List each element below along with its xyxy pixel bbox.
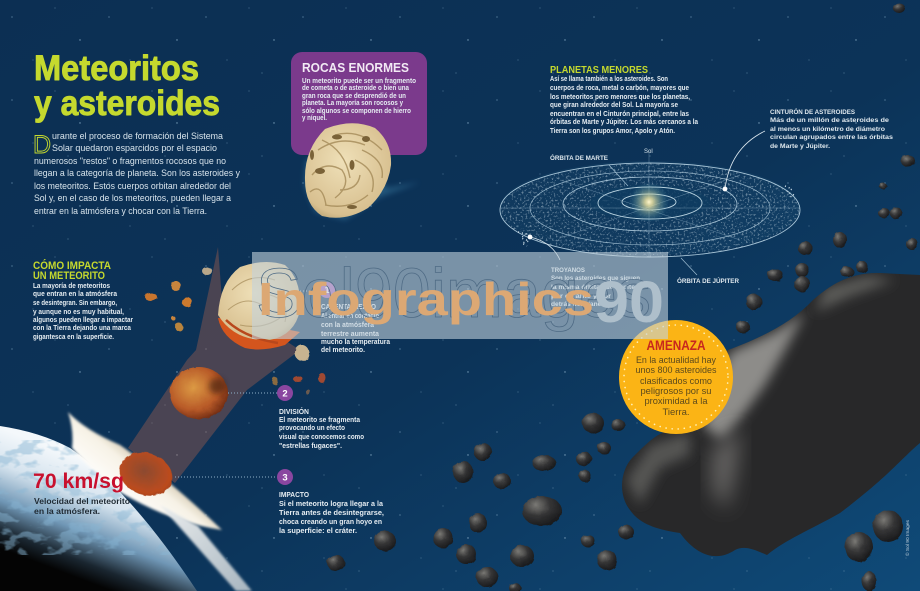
step 3: impacto: Tierra antes de desintegrarse, [279,510,384,517]
callout: amenaza [619,320,733,434]
step 2: división: provocando un efecto [279,425,345,432]
callout: amenaza: proximidad a la [644,396,708,407]
panel: rocas enormes: Un meteorito puede ser un fragmento [302,78,416,85]
intro text block with drop cap: Solar quedaron esparcidos por el espacio [52,143,217,154]
intro text block with drop cap: D [33,131,51,159]
label: troyanos: detrás del planeta. [551,301,609,308]
intro text block with drop cap: entrar en la atmósfera y chocar con la Tierra. [34,206,207,217]
label: órbita de Júpiter [677,258,739,285]
title: y asteroides [34,84,220,123]
panel: rocas enormes: planeta. La mayoría son rocosos y [302,100,403,107]
illustration: impacting meteor [113,445,179,503]
panel: cómo impacta un meteorito: se desintegran. Sin embargo, [33,300,117,307]
text: 70 km/sg speed: 70 km/sg [33,470,124,493]
panel: planetas menores text: Así se llama también a los asteroides. Son [550,76,668,83]
step 3: impacto [175,469,384,535]
text: 70 km/sg speed: en la atmósfera. [34,506,100,516]
text: Sol label: Sol [644,149,653,155]
label: troyanos: la misma órbita que Júpiter, [551,284,639,291]
intro text block with drop cap [33,131,240,217]
step 2: división [228,385,364,450]
label: troyanos [528,235,640,308]
step 1: calentamiento: Al entrar en contacto [321,313,379,320]
callout: amenaza: En la actualidad hay [636,355,716,366]
label: troyanos: TROYANOS [551,267,586,274]
panel: planetas menores text: PLANETAS MENORES [550,64,648,76]
step 1: calentamiento: mucho la temperatura [321,339,390,346]
panel: planetas menores text [550,64,698,135]
step 3: impacto: IMPACTO [279,492,310,499]
illustration: Earth limb [0,426,197,591]
illustration: fragmenting meteor [170,367,228,419]
panel: planetas menores text: encuentran en el Cinturón principal, entre las [550,111,689,118]
intro text block with drop cap: urante el proceso de formación del Sistema [52,131,224,142]
big asteroid [610,265,920,565]
label: órbita de Júpiter: ÓRBITA DE JÚPITER [677,276,739,285]
step 3: impacto: Si el meteorito logra llegar a la [279,501,383,508]
label: troyanos: Son los asteroides que siguen [551,275,640,282]
callout: amenaza: clasificados como [640,376,712,387]
illustration: atmospheric shock wave [68,412,252,591]
intro text block with drop cap: los meteoritos. Estos cuerpos orbitan alrededor del [34,181,231,192]
step 2: división: El meteorito se fragmenta [279,417,360,424]
panel: cómo impacta un meteorito: La mayoría de meteoritos [33,283,110,290]
intro text block with drop cap: llegan a la categoría de planeta. Son los asteroides y [34,168,240,179]
step 1: calentamiento [300,282,390,354]
step 1: calentamiento: CALENTAMIENTO [321,304,376,311]
title [34,49,220,123]
step 3: impacto: la superficie: el cráter. [279,528,357,535]
step 2: división: visual que conocemos como [279,434,364,441]
panel: cómo impacta un meteorito: que entran en la atmósfera [33,291,117,298]
panel: planetas menores text: cuerpos de roca, metal o carbón, mayores que [550,85,689,92]
chart: solar system orbit diagram [500,150,800,257]
step 2: división: DIVISIÓN [279,407,309,416]
label: cinturón de asteroides: CINTURÓN DE ASTEROIDES [770,107,856,116]
small meteor fragments [145,267,326,395]
text: 70 km/sg speed [33,470,130,516]
panel: cómo impacta un meteorito: y aunque no es muy habitual, [33,309,124,316]
illustration: meteor trajectory beam [128,247,300,483]
step 1: calentamiento: con la atmósfera [321,322,374,329]
panel: cómo impacta un meteorito: con la Tierra dejando una marca [33,325,131,332]
step 1: calentamiento: 1 [324,285,330,295]
label: cinturón de asteroides: circulan agrupados entre las órbitas [770,134,893,141]
label: órbita de Marte [550,153,628,186]
step 3: impacto: choca creando un gran hoyo en [279,519,382,526]
label: troyanos: por delante y por [551,293,612,300]
panel: cómo impacta un meteorito: algunos pueden llegar a impactar [33,317,133,324]
step 2: división: 2 [282,388,288,400]
title: Meteoritos [34,49,199,88]
callout: amenaza: unos 800 asteroides [636,365,717,376]
panel: planetas menores text: órbitas de Marte y Júpiter. Los más cercanos a la [550,119,698,126]
panel: rocas enormes: gran roca que se desprendió de un [302,93,406,100]
label: cinturón de asteroides: Más de un millón de asteroides de [770,117,889,124]
panel: rocas enormes: de cometa o de asteroide o bien una [302,85,409,92]
text: copyright: © Sol 90 Images [904,519,910,556]
panel: planetas menores text: los meteoritos pero menores que los planetas, [550,94,690,101]
step 1: calentamiento: del meteorito. [321,347,365,354]
panel: rocas enormes: y níquel. [302,115,327,122]
panel: cómo impacta un meteorito: CÓMO IMPACTA [33,259,111,272]
step 1: calentamiento: terrestre aumenta [321,331,379,338]
callout: amenaza: peligrosos por su [640,386,712,397]
watermark overlay: Sol90images [256,254,651,332]
step 3: impacto: 3 [282,472,288,484]
panel: cómo impacta un meteorito [33,259,133,341]
panel: rocas enormes: ROCAS ENORMES [302,60,409,75]
label: cinturón de asteroides: de Marte y Júpiter. [770,143,830,150]
watermark overlay: Infographics [258,273,594,325]
watermark overlay: 90 [594,270,664,335]
panel: cómo impacta un meteorito: gigantesca en la superficie. [33,334,114,341]
panel: rocas enormes: sólo algunos se componen de hierro [302,108,411,115]
label: cinturón de asteroides [723,107,893,191]
intro text block with drop cap: Sol y, en el caso de los meteoritos, pueden llegar a [34,193,232,204]
panel: rocas enormes [291,52,427,155]
icon: cream meteorite with blue trail [304,123,420,220]
illustration: heated meteor [218,262,300,349]
callout: amenaza: AMENAZA [646,338,706,353]
label: cinturón de asteroides: al menos un kilómetro de diámetro [770,126,885,133]
label: órbita de Marte: ÓRBITA DE MARTE [550,153,609,162]
intro text block with drop cap: numerosos "restos" o fragmentos rocosos que no [34,156,226,167]
panel: cómo impacta un meteorito: UN METEORITO [33,270,105,282]
panel: planetas menores text: que giran alrededor del Sol. La mayoría se [550,102,678,109]
callout: amenaza: Tierra. [662,407,690,418]
step 2: división: "estrellas fugaces". [279,443,342,450]
text: 70 km/sg speed: Velocidad del meteorito [34,496,130,506]
small asteroids field [327,3,918,591]
panel: planetas menores text: Tierra son los grupos Amor, Apolo y Atón. [550,128,675,135]
